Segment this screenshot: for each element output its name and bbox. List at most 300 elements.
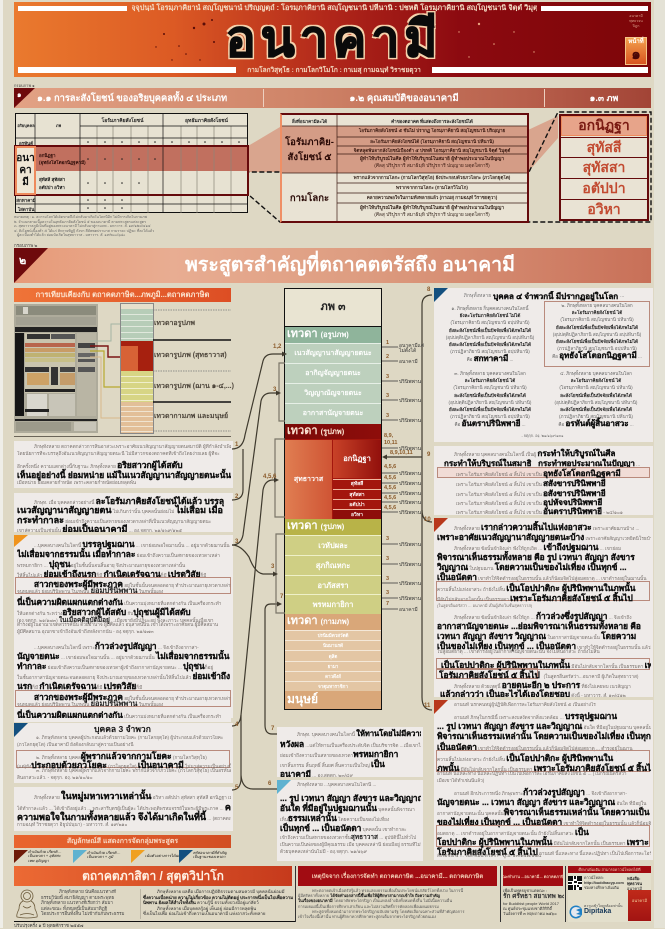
text block 10: เวทนา สัญญา สังขาร วิญญาณ ในอากาสานัญจายตนะนั้น โดยความ — [437, 631, 636, 641]
text block 7 — [277, 727, 423, 777]
credit lines: ณ ศูนย์ประชุมแห่งชาติสิริกิติ์ — [503, 906, 552, 911]
kama heading — [285, 614, 381, 630]
book text: พุทธวจน — [627, 881, 642, 886]
r3 a text: ปรินิพพาน — [399, 379, 421, 385]
legend item 2: ดำเนินด้วย เกียรติ ... — [87, 851, 121, 855]
footer caption: ปรับปรุงครั้ง ๑ ปี พุทธศักราช ๒๕๕๗ — [14, 923, 83, 928]
row 4 — [360, 156, 504, 169]
yellow row 2: สุภกิณหกะ — [316, 560, 350, 570]
anagami highlight frame — [14, 145, 249, 196]
text block 10: ภิกษุทั้งหลาย เรากล่าวความสิ้นไปแห่งอาสวะ เพราะอาศัยฌานบ้าง ... — [454, 522, 639, 532]
realm sudassi — [561, 137, 647, 157]
number 2: 2 — [235, 494, 238, 500]
kama row 6: จาตุมหาราชิกา — [318, 684, 348, 689]
info box heading — [568, 866, 651, 873]
text block 11: อากาสานัญจายตนะนั้น บุคคลนั้นพิจารณาเห็นธรรมเหล่านั้น โดยความเป็น — [437, 807, 650, 817]
header banner — [14, 2, 651, 77]
main title: อนาคามี — [226, 10, 442, 66]
text block 11: โอปปาติกะ ผู้ปรินิพพานในภพนั้น มีอันไม่กลับจากโลกนั้น เป็นธรรมดา เพราะ — [437, 837, 649, 847]
text block 3: ในชั้นอากาสานัญจายตนะจนตลอดอายุ จึงประมาณอายุของเทวดาเหล่านั้นให้สิ้นไปแล้ว ย่อมเข้าถึง — [17, 671, 230, 681]
text block 9: เพราะโอรัมภาคิยสังโยชน์ ๕ สิ้นไป เขาเป็น อสังขารปรินิพพายี — [456, 489, 606, 498]
r3 g: 3 — [386, 590, 389, 596]
r456 d text: ปรินิพพาน — [399, 500, 421, 506]
kama row 4: ผู้ทำให้บริบูรณ์ในศีล ผู้ทำให้บริบูรณ์ในสมาธิ ผู้ทำพอประมาณในปัญญา — [360, 206, 504, 211]
highlight box disciple — [15, 577, 231, 594]
r456 a: 4,5,6 — [384, 464, 396, 470]
legend item 3: เน้นตัวอย่างการได้ฌาน — [145, 854, 183, 858]
page edge strips — [0, 0, 3, 928]
header speckles — [155, 19, 535, 61]
light blue corner tag — [277, 780, 291, 794]
akanittha block: อกนิฏฐา — [343, 454, 371, 463]
text block 2: ภิกษุท. เมื่อ บุคคลกล่าวอย่างนี้ ละโอรัมภาคิยสังโยชน์ได้แล้ว บรรลุ — [34, 496, 224, 506]
text block 3 — [14, 535, 233, 718]
footer text left: ภิกษุทั้งหลาย นั่นคือแนวทางที่ — [59, 889, 116, 894]
kama row 5: ดาวดึงส์ — [325, 674, 341, 679]
text block 6: ภิกษุทั้งหลาย ...บุคคลบางคนในโลกนี้ ... — [297, 782, 376, 787]
text block 10: ภิกษุทั้งหลาย ข้อนั้นข้าอิงเล่า ฟังให้ถูกเถิด ... เข้าถึงปฐมฌาน ... เขาย่อม — [454, 542, 621, 552]
person 4: ๔. ภิกษุทั้งหลาย บุคคลบางคนในโลก — [560, 371, 632, 376]
legend item 4: ตรัสอนาคามีที่สำคัญ — [193, 851, 227, 855]
text block 6: อันใด ที่มีอยู่ในปฐมฌานนั้น บุคคลนั้นพิจารณา — [280, 803, 415, 813]
text block 3: พรหมกายิกา ... ปุถุชนอยู่ในชั้นนั้นจนสิ้นอายุ จึงประมาณอายุของเทวดาเหล่านั้น — [17, 559, 185, 569]
label pure abodes: เทวดารูปภพ (สุทธาวาส) — [154, 352, 227, 359]
yellow heading: เทวดา (รูปภพ) — [287, 520, 344, 532]
text block 3: ให้แตกต่างกัน ระหว่างอริยสาวกผู้ได้สดับ กับปุถุชนผู้มิได้สดับ — [17, 607, 190, 617]
block 4 heading: บุคคล 3 จำพวก — [94, 724, 151, 734]
text block 5 — [14, 787, 233, 831]
kama row 1: พรากแล้วจากกามโลกะ (กามโลกวิสุทฺโธ) ยังประกอบด้วยภวโลกะ (ภวโลกยุตฺโต) — [354, 175, 510, 180]
col head right: คำของตถาคต ที่แสดงถึงการละสังโยชน์ได้ — [391, 119, 473, 124]
akanittha block — [333, 440, 381, 478]
r456 b text: ปรินิพพาน — [399, 481, 421, 487]
small emblem text above tab — [629, 14, 643, 28]
legend item 1: เทพ อุภิญญา — [28, 859, 49, 863]
r3 c text: ปรินิพพาน — [399, 418, 421, 424]
column header: lower fetters: โอรัมภาคิยสังโยชน์ — [102, 118, 143, 124]
r8 mid: 8,9,10,11 — [390, 450, 413, 456]
chart title: three realms: ภพ ๓ — [320, 301, 346, 313]
kama row 3: คลายความพอใจในกามทั้งหลายแล้ว (กาเมสุ กามฉนฺทํ วิราชยตุวา) — [367, 195, 497, 200]
text block 10: (ในสูตรอื่นตรัสว่า ... อนาคามี เป็นผู้เกิดในชั้นสุทธาวาส) — [437, 603, 532, 608]
table grid and marks — [16, 114, 247, 213]
credit lines: for Buddhist people World 2017 — [503, 901, 559, 906]
text block 3: ...บุคคลบางคนในโลกนี้ เพราะก้าวล่วงรูปสัญญา ... จึงเข้าถึงอากาสา- — [34, 641, 199, 651]
text block 11 — [434, 700, 653, 860]
text block 1: โดยนัยการที่จะบรรลุถึงอันเนวสัญญานาสัญญายตนะนี้ ไม่มีสาวกของตถาคตที่เข้าถึงโดยง่ายเลย ผู้ที่จะ — [17, 451, 220, 456]
arupa row 2: อากิญจัญญายตนะ — [305, 370, 361, 377]
mini yellow band — [121, 371, 153, 402]
person 4: (ภวปฏิลาภิยานิ สญฺโญชนานิ ปหีนานิ) — [559, 414, 633, 419]
r3 d: 3 — [386, 536, 389, 542]
highlight box 10c — [436, 668, 538, 679]
anagami label box: อนา คา มี — [16, 152, 35, 188]
realm atappa: อตัปปา — [582, 180, 626, 196]
number 3: 3 — [235, 539, 238, 545]
person 4: ละสังโยชน์เพื่อเป็นปัจจัยเพื่อได้ภพได้ — [560, 393, 632, 398]
r1 text: อนาคามีแต่ — [399, 343, 424, 349]
legend item 4: เป็นฐานะของเทวดา — [193, 855, 225, 859]
r3 g text: ปรินิพพาน — [399, 596, 421, 602]
number 7 lower: 7 — [271, 726, 274, 732]
connector 7 — [265, 604, 279, 734]
footer text left: โดยประการอื่นทั้งสิ้น ไม่เข้ากันกับพระธรรม — [41, 911, 124, 916]
r456 e text: ปรินิพพาน — [399, 510, 421, 516]
footer text right: ซึ่งเป็นไปเพื่อ ย่อมไม่เข้าถึงความเป็นอนาคามี แห่งอาสวะทั้งหลาย — [143, 911, 265, 916]
text block 4: three kinds of persons: ๒. ภิกษุทั้งหลาย บุคคลผู้พรากแล้วจากกามโยคะ (กามโลกวิสุทฺโธ) — [36, 751, 207, 761]
legend item 1: ดำเนินด้วย เกียรติ ... — [28, 850, 62, 854]
r7: 7 — [386, 601, 389, 607]
pure abodes heading — [285, 424, 381, 439]
label jhana: เทวดารูปภพ (ฌาน ๑-๔,...) — [154, 383, 234, 390]
person 1: คือ สกทาคามี ... — [467, 354, 513, 363]
table footnotes: ๓. สุทธาวาสภูมิเป็นที่อยู่ของพระอนาคามี ไม่กลับมาสู่กามภพ - มหาวาร. สํ. ๑๙/๑๒๔/๔๑๔ — [14, 224, 151, 228]
yellow row 1: เวหัปผละ — [318, 540, 348, 550]
realm atappa — [561, 178, 647, 199]
kama row 1: ปรนิมมิตวสวัตตี — [318, 633, 348, 638]
number 10: 10 — [424, 517, 431, 523]
person 3: ยังละสังโยชน์เพื่อเป็นปัจจัยเพื่อได้ภพไม่ได้ — [449, 407, 531, 412]
heading 1.3: ๑.๓ ภพ — [590, 93, 618, 103]
citation: - จตุกฺก. องฺ. ๒๑/๑๖๙/๑๓๑ — [521, 434, 564, 438]
mini red band — [121, 341, 153, 371]
r3 b: 3 — [386, 393, 389, 399]
arupa row 1 — [285, 343, 381, 363]
person 3: (ภวปฏิลาภิยานิ สญฺโญชนานิ อปฺปหีนานิ) — [450, 414, 530, 419]
row 4: ผู้ทำให้บริบูรณ์ในศีล ผู้ทำให้บริบูรณ์ในสมาธิ ผู้ทำพอประมาณในปัญญา — [360, 157, 504, 162]
red corner tag — [434, 518, 448, 532]
text block 6: ... รูป เวทนา สัญญา สังขาร และวิญญาณ — [280, 793, 421, 803]
right sutta numbers — [424, 285, 436, 715]
text block 6: ด้วยบุคคลเหล่านั้นไม่มี - องฺ.จตุกฺก. ๒๑/๑๖๙ — [280, 849, 367, 854]
brackets — [279, 363, 285, 421]
kama peach section — [285, 614, 381, 709]
header subtitle: กามโลกวิสุทฺโธ : กามโลกวิโมโก : กาเมสุ กามฉนฺทํ วิราชยตุวา — [247, 66, 421, 74]
footer divider 2 — [500, 866, 501, 922]
person 3: (โอรมฺภาคิยานิ สญฺโญชนานิ ปหีนานิ) — [453, 385, 527, 390]
text block 1: ภิกษุทั้งหลาย ตถาคตกล่าวการสิ้นอาสวะเพราะอาศัยเนวสัญญานาสัญญายตนสมาบัติ ผู้ที่กำลังบำเพ็ญ — [34, 444, 231, 449]
kama row 4 — [285, 661, 381, 671]
arupa row 4: อากาสานัญจายตนะ — [303, 410, 363, 417]
legend banner: สัญลักษณ์สี แสดงการจัดกลุ่มพระสูตร — [67, 838, 178, 845]
table footnotes: หมายเหตุ : ๑. ละกามโลกได้เด็ดขาดจึงไม่กลับมาเกิดในโลกนี้อีก ไม่มีการเกิดในกามภพ — [14, 215, 147, 219]
connector 1,2 — [232, 354, 284, 449]
legend — [14, 850, 227, 863]
footer text left — [41, 889, 124, 916]
realm akanittha: อกนิฏฐา — [578, 117, 630, 133]
upper salmon region — [282, 126, 531, 173]
connector 3 — [232, 393, 278, 545]
heading 8: ภิกษุทั้งหลาย ... — [464, 293, 624, 299]
footer heading: tathagata: ตถาคตภาสิตา / สุตฺตวิปาโก — [82, 868, 224, 882]
person 2 highlight — [544, 301, 650, 367]
yellow row 3: อาภัสสรา — [317, 580, 349, 590]
footer text right: นิพพาน ยังผลให้สำเร็จทั้งสิ้น ความรู้นี้ ธรรมทั้งปวงมีอยู่แก่สัตว์ — [143, 900, 259, 905]
text block 11: อานนท์ ภิกษุในกรณีนี้ เพราะสงบสงัดจากสิ่งแวดล้อม ... บรรลุปฐมฌาน — [454, 711, 617, 721]
section 2 heading bar — [14, 248, 651, 283]
text block 3: ผู้มีศีลสมาน อุเบกขาเข้าถึงอันเข้าถึงหลังจากนั้น - องฺ.จตุกฺก. ๒๑/๑๗๓ — [17, 629, 154, 634]
person 4 — [544, 370, 648, 432]
person 1: ๑. ภิกษุทั้งหลาย ก็บุคคลบางคนในโลกนี้ — [451, 306, 529, 311]
blue corner tag — [14, 723, 28, 737]
text block 6: เห็นธรรมเหล่านั้น โดยความเป็นของไม่เที่ยง — [280, 813, 389, 823]
text block 10: โอรัมภาคิยสังโยชน์ ๕ สิ้นไป (ในสูตรอื่นตรัสว่า...อนาคามี ผู้เกิดในสุทธาวาส) — [439, 670, 638, 680]
suddhavasa block: สุทธาวาส — [294, 476, 323, 483]
section 1 heading bar — [14, 88, 651, 108]
text block 10: เป็นอนัตตา เขาทำให้จิตดำรงอยู่ในธรรมนั้น แล้วก็น้อมจิตไปสู่อมตธาตุ ... เขาดำรงอยู่ในฌานนั้น — [437, 572, 646, 582]
section 1 number triangle: ๑ — [17, 92, 21, 99]
footer heading: about: เหตุปัจจาก เรื่องการจัดทำ ตถาคตภาษิต ...อนาคามี... ตถาคตภาษิต — [312, 874, 483, 880]
right edge strip — [654, 0, 665, 928]
person 1: ยังละสังโยชน์เพื่อเป็นปัจจัยเพื่อได้ภพไม่ได้ — [449, 328, 531, 333]
header bottom white bar right — [432, 67, 648, 73]
mini realm chart — [121, 304, 153, 433]
r8: 10,11 — [384, 440, 397, 446]
mini chart divider lines — [153, 310, 231, 432]
text block 9: เพราะโอรัมภาคิยสังโยชน์ ๕ สิ้นไป เขาเป็น อุปหัจจปรินิพพายี — [456, 498, 602, 507]
icon: seated Buddha — [16, 890, 38, 918]
publisher name: ความเข้าใจถูกต้องเท่านั้น — [584, 904, 622, 908]
text block 8: four persons — [434, 288, 653, 442]
number 4: 4 — [235, 722, 238, 728]
kama row 6 — [285, 681, 381, 691]
fetters label: โอรัมภาคิย- — [285, 136, 334, 148]
human row — [285, 691, 381, 709]
website text — [584, 876, 624, 890]
page label: หน้าที่ — [628, 39, 644, 45]
r456 e: 4,5,6 — [384, 505, 396, 511]
table 1.1 — [15, 113, 248, 213]
human row: มนุษย์ — [287, 692, 318, 706]
text strip continuing block 3 — [14, 718, 231, 722]
number 3 lower arrow: 3 — [271, 564, 274, 570]
legend item 4 — [179, 850, 227, 863]
footer text left: ธรรมวินัยนี้ สมาธิสัญญา ตามพระพุทธ — [41, 895, 114, 900]
r7 text: อนาคามี — [399, 607, 418, 613]
publisher name — [584, 903, 622, 915]
yellow row 4 — [285, 594, 381, 614]
person 3: (อุปปตฺติปฏิลาภิยานิ สญฺโญชนานิ ปหีนานิ) — [449, 400, 531, 405]
person 2 highlight: (อุปปตฺติปฏิลาภิยานิ สญฺโญชนานิ อปฺปหีนานิ) — [553, 332, 641, 337]
r8 — [384, 433, 398, 446]
row name akanittha: (อุทธังโสโตอกนิฏฐคามี) — [39, 160, 86, 165]
section 2 number triangle — [14, 248, 48, 283]
footer text left: ภิกษุทั้งหลาย แนวทางที่เรียกว่า สัมมา — [41, 900, 113, 905]
text block 11: เมื่อเขาได้ทำเช่นนี้แล้ว) — [437, 778, 484, 783]
kama row 1 — [285, 630, 381, 640]
thumbnail of related chart — [14, 304, 98, 433]
aviha: อวิหา — [351, 512, 363, 518]
yellow heading — [285, 519, 381, 535]
rupa jhana yellow section — [285, 519, 381, 615]
person 1: (อุปปตฺติปฏิลาภิยานิ สญฺโญชนานิ อปฺปหีนานิ) — [446, 335, 534, 340]
footer heading: project — [503, 866, 563, 886]
text block 5: กามฉนฺทํ วิราชยตุวา อิธูปปนฺนา) - มหาวาร. สํ. ๑๙/๒๑๐ — [17, 822, 127, 827]
person 1: (โอรมฺภาคิยานิ สญฺโญชนานิ อปฺปหีนานิ) — [450, 320, 529, 325]
text block 9: เพราะโอรัมภาคิยสังโยชน์ ๕ สิ้นไป เขาเป็น สสังขารปรินิพพายี — [456, 479, 606, 488]
number 7 arrow: 7 — [280, 594, 283, 600]
text block 1: เห็นอยู่อย่างนี้ ย่อมหน่าย แม้ในเนวสัญญานาสัญญายตนะนั้น — [17, 470, 231, 480]
sudassi: สุทัสสี — [351, 481, 363, 487]
text block 1: อีกครั้งหนึ่ง ความแตกต่างนี้กับฐานะ ภิกษุทั้งหลาย อริยสาวกผู้ได้สดับ — [17, 460, 183, 470]
text block 3: ให้สิ้นไปแล้ว ย่อมเข้าถึงนรกก็มี กำเนิดเดรัจฉานก็มี เปรตวิสัยก็มี — [17, 569, 206, 579]
text block 7: หวังผล ...แต่ให้ทานเป็นเครื่องประดับจิต เป็นบริขารจิต ...เมื่อเขาไป — [280, 739, 421, 749]
rupa pure abodes section — [285, 424, 381, 520]
publisher logo — [570, 906, 582, 918]
row name akanittha — [39, 153, 86, 166]
text block 10: ภิกษุทั้งหลาย ข้อนั้นข้าอิงเล่า ฟังให้ถูก ... ก้าวล่วงซึ่งรูปสัญญา ... จึงเข้าถึง — [454, 611, 632, 621]
kamaloka label: กามโลกะ — [290, 192, 329, 204]
yellow row 2 — [285, 555, 381, 575]
person 3: ละสังโยชน์เพื่อเป็นปัจจัยเพื่อได้ภพได้ — [454, 393, 526, 398]
person 2 highlight: ๒. ภิกษุทั้งหลาย บุคคลบางคนในโลก — [561, 303, 633, 308]
anagami label box — [15, 146, 36, 195]
mini orange block — [121, 346, 138, 371]
yellow row 4: พรหมกายิกา — [313, 600, 353, 608]
website text: http://buddhaoyp.com — [584, 881, 624, 885]
sudassi — [333, 479, 381, 488]
highlight box anagami — [16, 750, 230, 768]
text block 3: สาวกของพระผู้มีพระภาค อยู่ในชั้นนั้นจนตลอดอายุ ทำประมาณอายุเทวดาเหล่านั้น — [34, 579, 231, 589]
text block 10: วิญญาณ ในปฐมฌาน โดยความเป็นของไม่เที่ยง เป็นทุกข์ ... — [437, 562, 627, 572]
kama row 2 — [285, 640, 381, 650]
chart title: three realms — [285, 289, 381, 327]
section 2 title: พระสูตรสำคัญที่ตถาคตตรัสถึง อนาคามี — [185, 254, 515, 276]
number 6: 6 — [268, 781, 271, 787]
info box — [568, 866, 651, 922]
comparison banner: การเทียบเคียงกับ ตถาคตภาษิต...ภพภูมิ...ตถาคตภาษิต — [36, 290, 209, 299]
kama row 2: นิมมานรดี — [323, 643, 343, 648]
website text: ช่องทางศึกษาเพิ่มเติม — [584, 886, 619, 890]
kama heading: เทวดา (กามภพ) — [287, 615, 349, 627]
book text: อนาคามี — [627, 886, 642, 891]
left sutta reference numbers — [235, 344, 284, 791]
credit lines: วันอังคารที่ ๓ พฤษภาคม ๒๕๖๐ — [503, 911, 557, 916]
legend banner — [14, 835, 231, 848]
arupa row 4 — [285, 403, 381, 423]
number 11: 11 — [424, 703, 430, 709]
text block 10: ความสิ้นไปแห่งอาสวะ ถ้ายังไม่สิ้น เป็นโอปปาติกะ ผู้ปรินิพพานในภพนั้น — [437, 583, 635, 593]
row 2: ละโอรัมภาคิยสังโยชน์ได้ (โอรมฺภาคิยานิ สญฺโญชนานิ ปหีนานิ) — [370, 139, 494, 144]
person 3 — [436, 370, 544, 432]
central realm chart — [284, 288, 382, 710]
text block 11: สังโยชน์ ๕ ... ในกรณีนี้ ตรัสว่า - มู.ม. ๑๓/๑๕๗/๑๕๔ — [437, 853, 542, 858]
fetters label — [285, 136, 334, 162]
label kama: เทวดากามภพ และมนุษย์ — [154, 413, 228, 420]
atappa: อตัปปา — [349, 502, 365, 508]
text block 2: กระทำกาละ ย่อมเข้าถึงความเป็นสหายของเทวดาเหล่าที่เป็นเนวสัญญานาสัญญายตนะ — [17, 515, 211, 525]
row name sotapanna: โสดาบัน — [18, 207, 34, 212]
arupa row 3: วิญญาณัญจายตนะ — [304, 390, 362, 397]
realm sudassa — [561, 157, 647, 178]
legend item 2: เป็นเทวดา + ภูมิ — [87, 855, 113, 859]
footer text right: ภิกษุทั้งหลาย ผลคือ เมื่อการปฏิบัติธรรมตามสมควรมี บุคคลนั้นย่อมมี — [157, 889, 285, 894]
arupa row 1: เนวสัญญานาสัญญายตนะ — [294, 350, 372, 357]
footer divider 3 — [565, 866, 566, 922]
text block 11: อานนท์ นี้แหละทาง นี้แหละปฏิปทา เป็นไปเพื่อการละโอรัมภาคิยสังโยชน์ ๕ ... (ในกรณีนี้ตรัสว่า — [437, 771, 626, 776]
r3 c: 3 — [386, 413, 389, 419]
header chant text: ปจฺจุปนฺนํ โอรมฺภาคิยานํ สญฺโญชนานํ ปริญฺญตฺถํ : โอรมฺภาคิยานิ สญฺโญชนานิ ปหีนานิ : ปชหติ โอรมฺภาคิยานิ สญฺโญชนานิ จิตฺตํ วิมุตฺตํ — [132, 3, 537, 12]
row name arahant: อรหันต์ — [19, 141, 33, 146]
person 4: (อุปปตฺติปฏิลาภิยานิ สญฺโญชนานิ ปหีนานิ) — [555, 400, 637, 405]
section 1 small label: กรอบภาพ ๑ — [14, 83, 35, 88]
person 1: (ภวปฏิลาภิยานิ สญฺโญชนานิ อปฺปหีนานิ) — [450, 349, 530, 354]
column header: higher fetters: อุทธัมภาคิยสังโยชน์ — [185, 118, 228, 124]
person 3: ๓. ภิกษุทั้งหลาย บุคคลบางคนในโลก — [454, 371, 526, 376]
person 2 highlight: (โอรมฺภาคิยานิ สญฺโญชนานิ ปหีนานิ) — [560, 317, 634, 322]
text block 10 — [434, 518, 653, 697]
realm akanittha — [561, 116, 647, 136]
number 1,2 arrow: 1,2 — [273, 344, 281, 350]
text block 11: เป็นอนัตตา เขาทำให้จิตดำรงอยู่ในธรรมนั้น แล้วก็น้อมจิตไปสู่อมตธาตุ ... ดำรงอยู่ในฌาน — [437, 742, 633, 752]
small emblem text above tab: อนาคามี — [629, 14, 643, 18]
panel 1.3: realms list — [559, 114, 649, 221]
text block 10: ไปสู่อมตธาตุ ... เขาดำรงอยู่ในอากาสานัญจายตนะนั้น จึงไม่สิ้นอาสวะ ถ้ายังไม่สิ้น — [437, 649, 600, 654]
atappa — [333, 499, 381, 509]
about text: ผู้มีศรัทธาทั้งหลาย ได้จัดทำเอกสารนี้ขึ้นเพื่อให้ผู้ศึกษาสามารถเข้าใจ ถึงความสำคัญ — [298, 893, 440, 898]
footer text right — [143, 889, 293, 916]
footer text left: แต่ละขณะ ทั้งหมดนี้เป็นสัมมาทิฏฐิ — [41, 906, 107, 911]
yellow row 3 — [285, 575, 381, 595]
header top white bar right — [541, 6, 648, 11]
label arupa: เทวดาอรูปภพ — [154, 320, 195, 327]
highlight box disciple 2 — [15, 690, 231, 707]
r3 e text: ปรินิพพาน — [399, 562, 421, 568]
table footnotes: ผู้ละเบื้องต่ำได้แล้ว ย่อมบังเกิดในสุทธาวาส - มหาวาร. สํ. ๑๙/๒๐๐/๖๘๐ — [17, 233, 125, 237]
person 1: ยังละสังโยชน์เพื่อเป็นปัจจัยเพื่อได้ภพไม่ได้ — [449, 342, 531, 347]
publisher name: Dipitaka — [584, 908, 611, 915]
person 4: ละสังโยชน์เพื่อเป็นปัจจัยเพื่อได้ภพได้ — [560, 407, 632, 412]
text block 10: มีอันไม่กลับจากโลกนั้น เป็นธรรมดา เพราะโอรัมภาคิยสังโยชน์ ๕ สิ้นไป — [437, 593, 633, 603]
text block 10: ภิกษุทั้งหลาย ด้วยเหตุนี้ อายตนะอีก ๒ ประการ ที่ยังไม่เคยพบ เนวสัญญา — [454, 680, 631, 690]
page number: ๑ — [631, 46, 641, 63]
row 4: (ศีลสุ ปริปูรการี สมาธิมฺหิ ปริปูรการี ปญฺญาย มตฺตโสการี) — [374, 164, 490, 169]
legend item 1: เป็นเทวดา + อุทิสสะ — [28, 854, 61, 858]
credit lines — [503, 901, 559, 916]
text block 3: จนหมดแล้ว ย่อมปรินิพพาน ในภพนั้น ย่อมปรินิพพาน ในภพนั้นเอง — [17, 699, 163, 708]
header bottom white bar left — [18, 67, 236, 73]
text block 4: three kinds of persons: (ภวโลกยุตฺโต) เป็นอาคามี ยังต้องกลับมาสู่ความเป็นอย่างนี้ — [17, 742, 134, 747]
text block 3: นรกก็มี กำเนิดเดรัจฉานก็มี เปรตวิสัยก็มี — [17, 681, 142, 691]
kama row 3: ดุสิต — [329, 654, 337, 658]
aviha — [333, 509, 381, 519]
book text: หนังสือ: — [627, 876, 640, 881]
text block 7: ภิกษุท. บุคคลบางคนในโลกนี้ ให้ทานโดยไม่มีความ — [297, 729, 421, 738]
text block 4: three kinds of persons: ๑. ภิกษุทั้งหลาย บุคคลผู้ประกอบแล้วด้วยกามโยคะ (กามโลกยุตฺโต) ผู้ประกอบแล้วด้วยภวโยคะ — [36, 735, 223, 740]
kama row 5 — [285, 671, 381, 681]
arupa green section — [285, 327, 381, 425]
connector 4,5,6 — [232, 480, 276, 726]
column header: person: อริยบุคคล — [17, 123, 35, 128]
text block 11: ... รูป เวทนา สัญญา สังขาร และวิญญาณ อันใด ที่มีอยู่ในปฐมฌาน บุคคลนั้น — [437, 721, 651, 731]
footer heading: tathagata — [14, 866, 292, 886]
person 2 highlight: ยังละสังโยชน์เพื่อเป็นปัจจัยเพื่อได้ภพไม่ได้ — [556, 339, 638, 344]
fetters label: สังโยชน์ ๕ — [288, 152, 331, 162]
row 3: จิตหลุดพ้นจากสังโยชน์เบื้องต่ำ ๕ ปชหติ โอรมฺภาคิยานิ สญฺโญชนานิ จิตฺตํ วิมุตฺตํ — [354, 148, 510, 153]
pure abodes heading: เทวดา (รูปภพ) — [287, 425, 344, 437]
text block 6 — [277, 780, 423, 861]
heading 8 — [444, 291, 644, 301]
sutta connector lines — [232, 294, 432, 791]
text block 11: นัญจายตนะ ... เวทนา สัญญา สังขาร และวิญญาณ อันใด ที่มีอยู่ใน — [437, 797, 646, 807]
section 1 number triangle — [14, 88, 35, 108]
about text: เข้าใจเรื่องนี้เท่านั้น ท่านผู้ศึกษาควรศึกษาพระสูตรเต็มจากพระไตรปิฎกด้วยตนเอง — [298, 914, 436, 919]
heading 8: บุคคล ๔ จำพวกนี้ มีปรากฏอยู่ในโลก — [493, 292, 618, 300]
salmon connector shapes and dashed zoom lines — [249, 111, 652, 223]
footer divider 1 — [295, 866, 296, 922]
about text: พระตถาคตเจ้าเมื่อตรัสรู้แล้ว ทรงแสดงธรรมเพื่อเป็นประโยชน์แก่สัตว์โลกทั้งปวง ในการนี้ — [312, 888, 463, 893]
mini green band — [121, 309, 153, 341]
